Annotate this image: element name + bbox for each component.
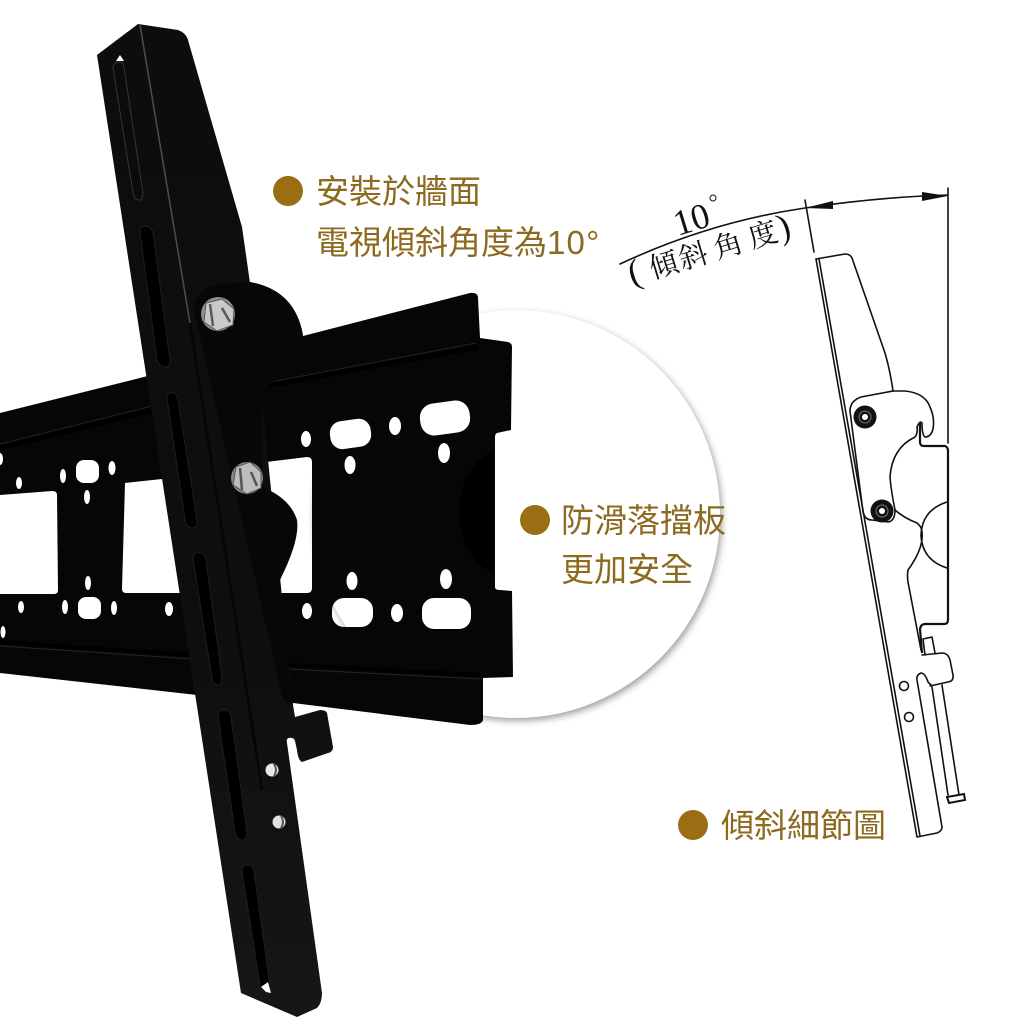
panel: white spotlight circle xyxy=(312,310,722,721)
icon: upper hex bolt xyxy=(201,297,235,331)
diagram: 10 degree dimension arc xyxy=(620,188,948,443)
angle caption: ) xyxy=(772,205,795,247)
back plate xyxy=(816,259,942,837)
upper arm outline xyxy=(816,254,893,391)
angle value: 10 xyxy=(668,195,714,244)
pivot bolts xyxy=(854,406,894,522)
angle caption: 傾 xyxy=(645,245,684,285)
callout: anti-slip baffle xyxy=(520,502,726,588)
arm body xyxy=(97,24,333,1017)
bottom hook xyxy=(922,653,953,686)
horizontal wall plate bracket xyxy=(0,293,513,725)
locking rod xyxy=(932,685,959,795)
icon: lower hex bolt xyxy=(231,462,263,494)
callout: anti-slip baffle: 更加安全 xyxy=(561,551,693,588)
angle caption: 斜 xyxy=(675,237,712,277)
angle caption: 度 xyxy=(744,215,782,255)
callout: wall mount tilt: 電視傾斜角度為10° xyxy=(316,224,601,261)
wall bracket profile xyxy=(920,423,948,653)
callout: wall mount tilt xyxy=(273,173,601,261)
callout: tilt detail diagram: 傾斜細節圖 xyxy=(721,807,886,844)
callout: anti-slip baffle: 防滑落擋板 xyxy=(561,502,726,539)
pivot plate xyxy=(890,391,934,650)
diagram: tilt side view line drawing xyxy=(816,254,965,837)
vertical tilt arm xyxy=(97,24,333,1017)
pivot plate xyxy=(193,282,303,705)
slot end gaps xyxy=(116,55,124,61)
arm slots xyxy=(113,62,270,992)
callout: wall mount tilt: 安裝於牆面 xyxy=(316,173,481,210)
arm crease highlight xyxy=(140,25,190,323)
small holes xyxy=(900,682,908,690)
lower screw holes xyxy=(266,764,286,828)
angle caption: ( xyxy=(623,251,646,293)
angle caption: 角 xyxy=(710,226,747,266)
